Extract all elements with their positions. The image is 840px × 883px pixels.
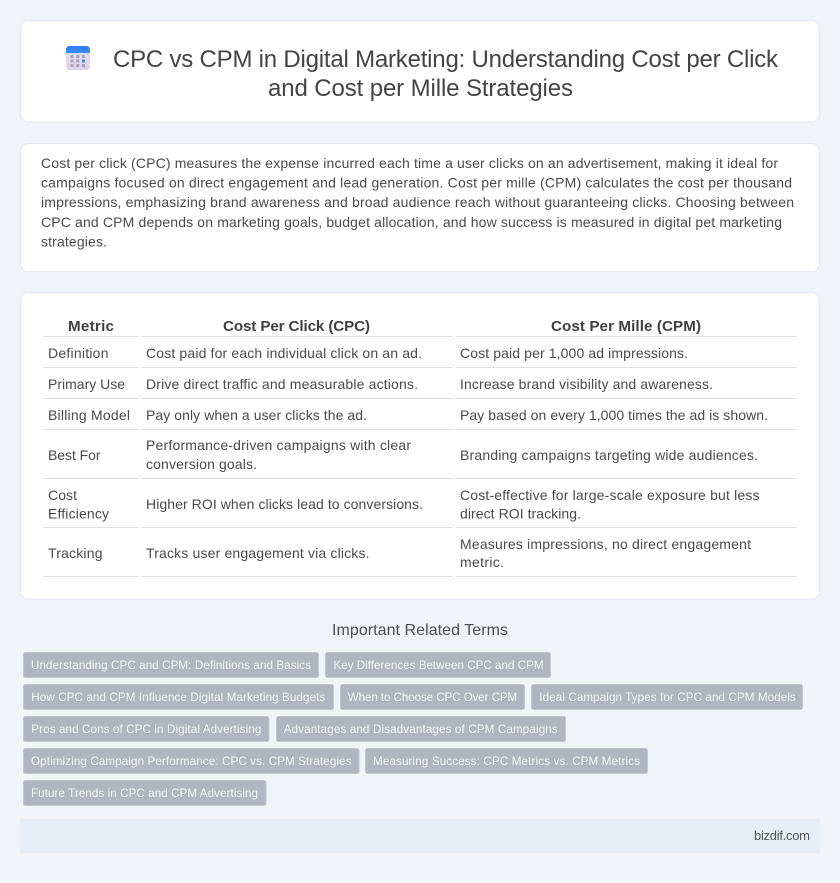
chip xyxy=(24,780,266,806)
chip xyxy=(24,684,334,710)
icon: calendar xyxy=(66,46,90,70)
table row: best for: Branding campaigns targeting wide audiences. xyxy=(460,447,758,463)
table row: best for: Performance-driven campaigns with clear xyxy=(146,437,411,453)
table row: primary use: Drive direct traffic and measurable actions. xyxy=(146,376,418,392)
chip xyxy=(24,652,318,678)
chip xyxy=(24,748,359,774)
table row: cost efficiency: direct ROI tracking. xyxy=(460,506,581,522)
chip: Measuring Success: CPC Metrics vs. CPM Metrics xyxy=(373,755,640,768)
table row: cost efficiency: Cost xyxy=(48,487,77,503)
table row: best for: conversion goals. xyxy=(146,456,257,472)
text block: introduction paragraph: impressions, emphasizing brand awareness and broad audience reach without guaranteeing clicks. Choosing between xyxy=(41,194,794,210)
table header row: Cost Per Click (CPC) xyxy=(223,318,370,335)
chip xyxy=(366,748,648,774)
table row: cost efficiency: Cost-effective for large-scale exposure but less xyxy=(460,487,760,503)
text block: introduction paragraph: Cost per click (CPC) measures the expense incurred each time a user clicks on an advertisement, making it ideal for xyxy=(41,155,778,171)
chip: Ideal Campaign Types for CPC and CPM Models xyxy=(539,691,796,704)
chip xyxy=(326,652,550,678)
table row: best for: Best For xyxy=(48,447,101,463)
text block: introduction paragraph: strategies. xyxy=(41,233,107,249)
chip xyxy=(24,716,269,742)
panel: header xyxy=(20,20,820,122)
table row: definition: Cost paid for each individual click on an ad. xyxy=(146,345,422,361)
table row: tracking: Tracking xyxy=(48,545,102,561)
table row: primary use: Primary Use xyxy=(48,376,125,392)
text block: introduction paragraph: campaigns focused on direct engagement and lead generation. Cost per mille (CPM) calculates the cost per thousand xyxy=(41,175,792,191)
table row: billing model: Pay based on every 1,000 times the ad is shown. xyxy=(460,407,768,423)
table row: cost efficiency: Efficiency xyxy=(48,506,109,522)
chip xyxy=(340,684,524,710)
table row: definition xyxy=(43,345,797,368)
table row: primary use: Increase brand visibility and awareness. xyxy=(460,376,713,392)
table row: billing model: Pay only when a user clicks the ad. xyxy=(146,407,367,423)
panel: comparison table xyxy=(20,292,820,599)
table header row: Metric xyxy=(68,318,114,335)
chip: Pros and Cons of CPC in Digital Advertising xyxy=(31,723,261,736)
table row: tracking: Tracks user engagement via clicks. xyxy=(146,545,370,561)
table row: tracking: metric. xyxy=(460,554,504,570)
panel: introduction xyxy=(20,144,820,272)
title xyxy=(113,46,779,102)
footer: bizdif.com xyxy=(754,828,810,843)
title: CPC vs CPM in Digital Marketing: Understanding Cost per Click xyxy=(113,46,779,73)
chip: Advantages and Disadvantages of CPM Campaigns xyxy=(284,723,558,736)
chip: Optimizing Campaign Performance: CPC vs. CPM Strategies xyxy=(31,755,352,768)
chip: Key Differences Between CPC and CPM xyxy=(334,659,544,672)
chip: Understanding CPC and CPM: Definitions and Basics xyxy=(31,659,311,672)
table row: billing model: Billing Model xyxy=(48,407,130,423)
text block: introduction paragraph xyxy=(41,155,794,249)
table row: primary use xyxy=(43,376,797,399)
table row: definition: Definition xyxy=(48,345,108,361)
table row: tracking xyxy=(43,536,797,577)
table row: billing model xyxy=(43,407,797,430)
heading: important related terms: Important Related Terms xyxy=(332,622,508,639)
text block: introduction paragraph: CPC and CPM depends on marketing goals, budget allocation, and how success is measured in digital pet marketing xyxy=(41,214,782,230)
chip xyxy=(276,716,566,742)
table header row: Cost Per Mille (CPM) xyxy=(551,318,701,335)
table row: definition: Cost paid per 1,000 ad impressions. xyxy=(460,345,688,361)
table row: cost efficiency: Higher ROI when clicks lead to conversions. xyxy=(146,496,423,512)
chip: Future Trends in CPC and CPM Advertising xyxy=(31,787,258,800)
title: and Cost per Mille Strategies xyxy=(268,75,573,102)
table row: tracking: Measures impressions, no direct engagement xyxy=(460,536,751,552)
chip: When to Choose CPC Over CPM xyxy=(348,691,517,704)
table header row xyxy=(43,318,797,337)
chip: How CPC and CPM Influence Digital Marketing Budgets xyxy=(31,691,326,704)
chip xyxy=(532,684,802,710)
table row: best for xyxy=(43,437,797,479)
panel: related term chips xyxy=(24,652,802,806)
table row: cost efficiency xyxy=(43,487,797,528)
footer xyxy=(20,819,820,853)
